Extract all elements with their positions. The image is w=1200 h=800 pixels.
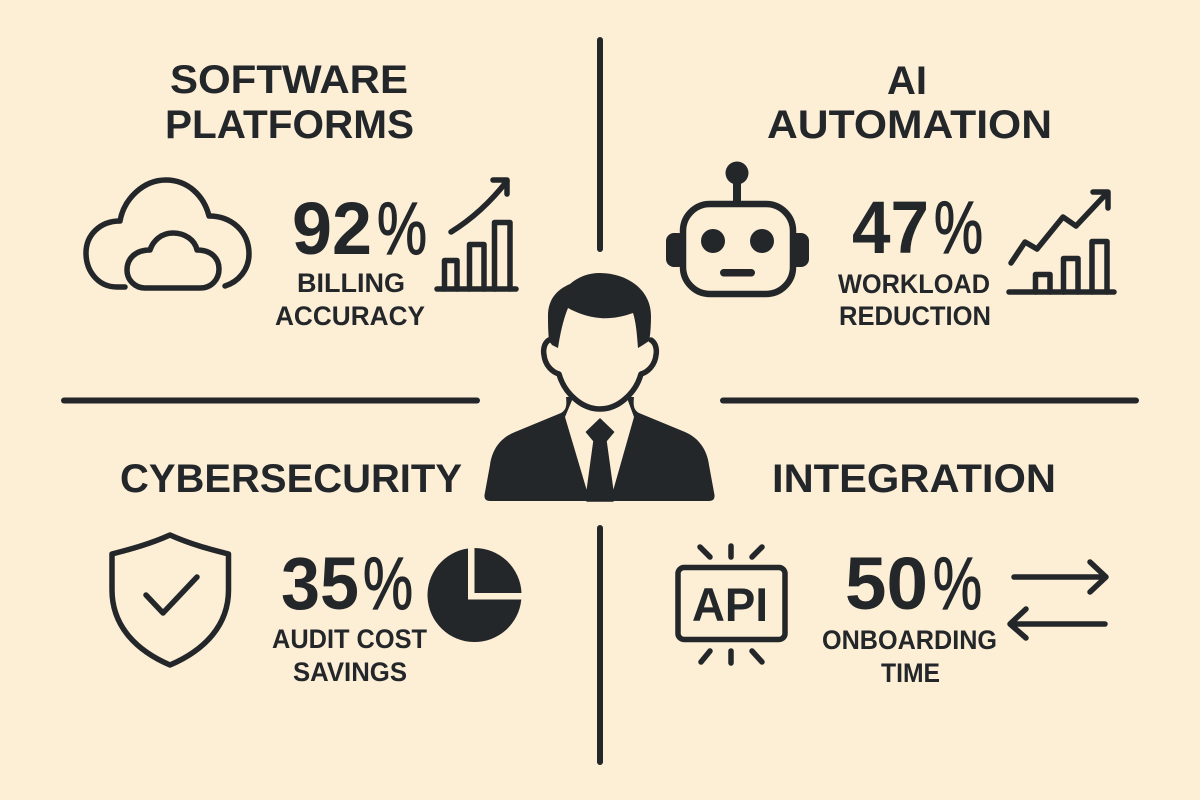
face outline (544, 340, 656, 409)
label: onboarding time: ONBOARDING (822, 625, 997, 655)
label: workload reduction (838, 269, 991, 331)
label: audit cost savings: AUDIT COST (272, 624, 427, 654)
icon: robot head (666, 162, 809, 294)
heading: software platforms (165, 58, 414, 147)
tie (586, 419, 614, 501)
panel: cybersecurity (112, 457, 522, 687)
stat: 35%: 35 (281, 542, 359, 625)
heading: ai automation (767, 59, 1052, 147)
face stroke (544, 340, 656, 409)
label: billing accuracy: BILLING (297, 268, 405, 298)
icon: pie chart (428, 548, 522, 642)
heading: ai automation: AUTOMATION (767, 103, 1052, 147)
shirt (565, 398, 634, 491)
heading: ai automation: AI (887, 59, 927, 103)
label: audit cost savings: SAVINGS (293, 657, 407, 687)
label: billing accuracy: ACCURACY (275, 301, 425, 331)
heading: cybersecurity: CYBERSECURITY (120, 457, 462, 501)
stat: 50% (845, 542, 982, 625)
stat: 92%: 92 (292, 187, 372, 270)
stat: 50%: 50 (845, 542, 928, 625)
heading: software platforms: PLATFORMS (165, 103, 414, 147)
stat: 35% (281, 542, 413, 625)
stat: 92% (292, 187, 427, 270)
icon: double cloud (86, 180, 249, 288)
label: workload reduction: REDUCTION (839, 301, 991, 331)
heading: software platforms: SOFTWARE (170, 58, 408, 102)
stat: 47%: % (934, 186, 983, 269)
stat: 50%: % (933, 542, 982, 625)
icon: bar chart with rising arrow (437, 180, 516, 289)
stat: 47% (852, 186, 983, 269)
body and suit (484, 397, 715, 501)
label: audit cost savings (272, 624, 427, 687)
panel: ai automation (666, 59, 1114, 331)
label: workload reduction: WORKLOAD (838, 269, 990, 299)
hair (548, 273, 651, 348)
panel: software platforms (86, 58, 516, 331)
stat: 92%: % (377, 187, 427, 270)
icon: two-way arrows (1010, 562, 1106, 638)
panel: integration (678, 457, 1106, 688)
heading: integration: INTEGRATION (772, 457, 1056, 501)
icon: shield with check (112, 535, 228, 665)
stat: 35%: % (363, 542, 413, 625)
icon: bar chart with zigzag arrow (1009, 192, 1114, 292)
label: onboarding time (822, 625, 997, 688)
icon: api screen (678, 546, 785, 663)
icon: api screen: API (692, 578, 768, 631)
icon: central businessman (484, 273, 715, 501)
label: onboarding time: TIME (881, 658, 940, 688)
stat: 47%: 47 (852, 186, 929, 269)
label: billing accuracy (275, 268, 425, 331)
